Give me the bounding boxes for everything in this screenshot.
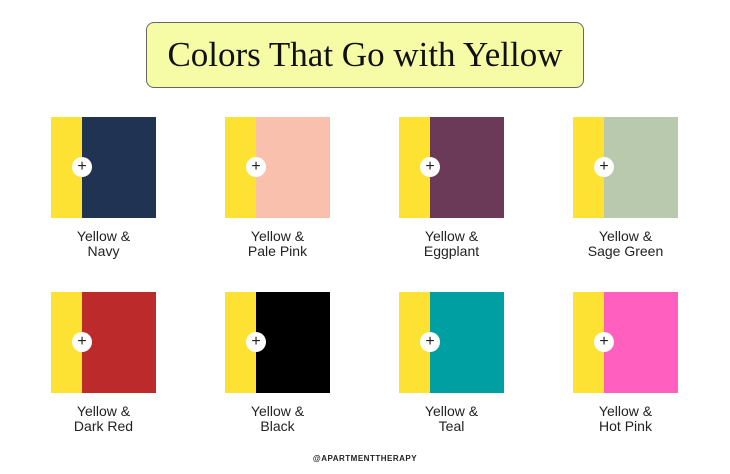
card: pale pink: Pale Pink <box>248 243 307 259</box>
card: navy: Yellow & <box>77 228 130 244</box>
card: dark red <box>51 292 156 434</box>
card: teal: Teal <box>439 418 464 434</box>
card: sage green <box>573 117 678 259</box>
card: black: Yellow & <box>251 403 304 419</box>
card: pale pink <box>225 117 330 259</box>
card: navy: + <box>77 158 87 175</box>
card: navy <box>51 117 156 259</box>
card: black: Black <box>260 418 295 434</box>
card: dark red: Dark Red <box>74 418 133 434</box>
card: hot pink: + <box>599 333 609 350</box>
card: hot pink <box>573 292 678 434</box>
card: hot pink: Hot Pink <box>599 418 652 434</box>
card: eggplant: + <box>425 158 435 175</box>
card: teal <box>399 292 504 434</box>
card: teal: Yellow & <box>425 403 478 419</box>
title <box>146 22 584 88</box>
card: pale pink: Yellow & <box>251 228 304 244</box>
card: black <box>225 292 330 434</box>
card: eggplant: Yellow & <box>425 228 478 244</box>
card: dark red: + <box>77 333 87 350</box>
card: teal: + <box>425 333 435 350</box>
footer credit: @APARTMENTTHERAPY <box>313 454 417 463</box>
card: pale pink: + <box>251 158 261 175</box>
title: Colors That Go with Yellow <box>167 35 563 74</box>
card: black: + <box>251 333 261 350</box>
card: dark red: Yellow & <box>77 403 130 419</box>
card: eggplant: Eggplant <box>424 243 479 259</box>
card: navy: Navy <box>88 243 119 259</box>
card: hot pink: Yellow & <box>599 403 652 419</box>
card: sage green: Yellow & <box>599 228 652 244</box>
card: sage green: + <box>599 158 609 175</box>
card: sage green: Sage Green <box>588 243 663 259</box>
card: eggplant <box>399 117 504 259</box>
